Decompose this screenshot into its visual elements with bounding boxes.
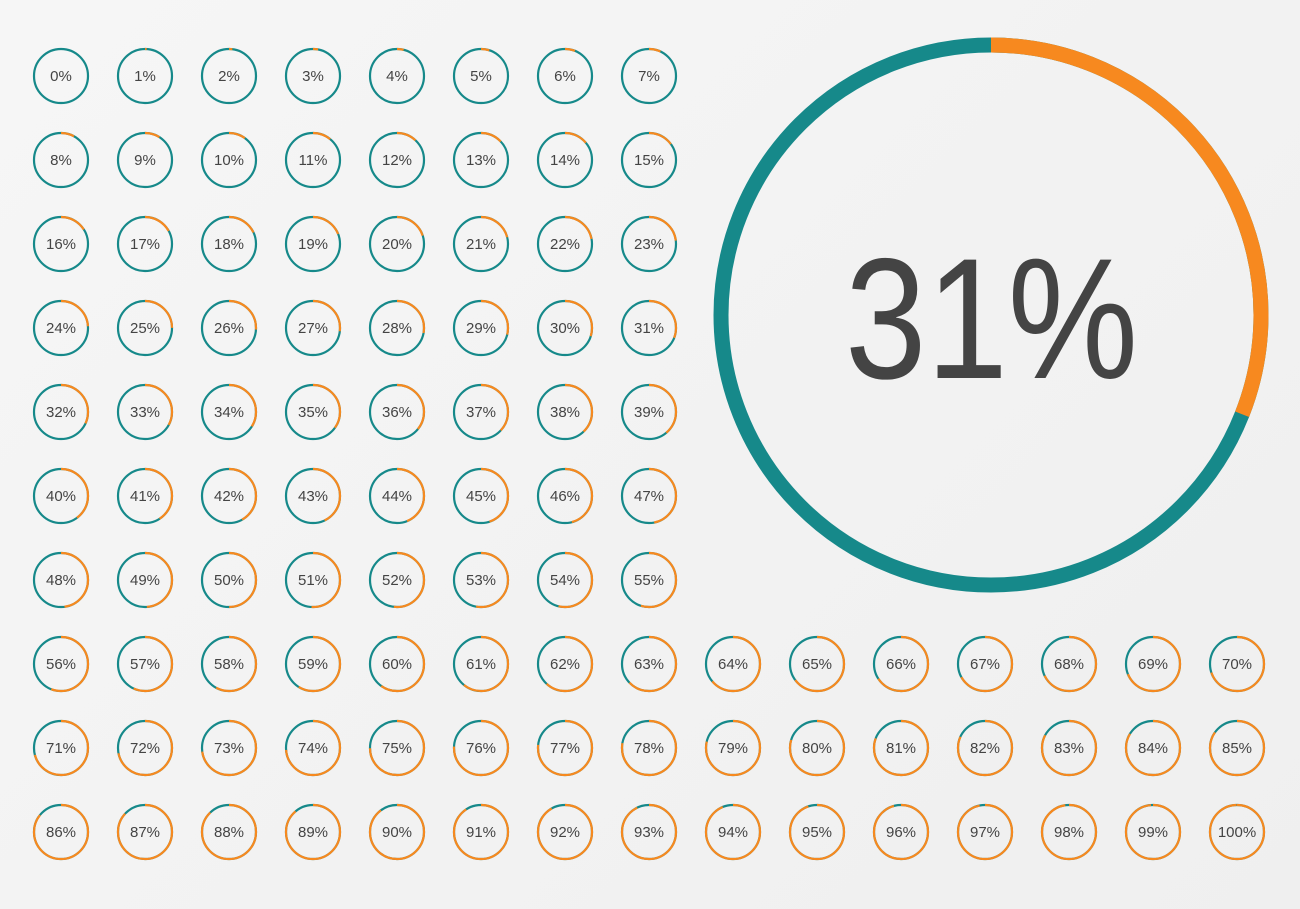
grid of small percentage rings: 8% xyxy=(50,152,72,169)
grid of small percentage rings: 26% xyxy=(214,320,244,337)
grid of small percentage rings: 47% xyxy=(634,488,664,505)
grid of small percentage rings: 89% xyxy=(298,824,328,841)
grid of small percentage rings: 55% xyxy=(634,572,664,589)
grid of small percentage rings: 19% xyxy=(298,236,328,253)
grid of small percentage rings: 40% xyxy=(46,488,76,505)
grid of small percentage rings: 76% xyxy=(466,740,496,757)
grid of small percentage rings: 30% xyxy=(550,320,580,337)
grid of small percentage rings: 49% xyxy=(130,572,160,589)
grid of small percentage rings: 69% xyxy=(1138,656,1168,673)
grid of small percentage rings: 98% xyxy=(1054,824,1084,841)
grid of small percentage rings: 85% xyxy=(1222,740,1252,757)
grid of small percentage rings: 42% xyxy=(214,488,244,505)
grid of small percentage rings: 0% xyxy=(50,68,72,85)
grid of small percentage rings: 94% xyxy=(718,824,748,841)
grid of small percentage rings: 62% xyxy=(550,656,580,673)
grid of small percentage rings: 63% xyxy=(634,656,664,673)
grid of small percentage rings: 14% xyxy=(550,152,580,169)
grid of small percentage rings: 43% xyxy=(298,488,328,505)
grid of small percentage rings: 28% xyxy=(382,320,412,337)
grid of small percentage rings: 36% xyxy=(382,404,412,421)
grid of small percentage rings: 97% xyxy=(970,824,1000,841)
grid of small percentage rings: 53% xyxy=(466,572,496,589)
grid of small percentage rings: 57% xyxy=(130,656,160,673)
grid of small percentage rings: 35% xyxy=(298,404,328,421)
grid of small percentage rings: 1% xyxy=(134,68,156,85)
grid of small percentage rings: 71% xyxy=(46,740,76,757)
grid of small percentage rings: 4% xyxy=(386,68,408,85)
grid of small percentage rings: 81% xyxy=(886,740,916,757)
grid of small percentage rings: 60% xyxy=(382,656,412,673)
grid of small percentage rings: 84% xyxy=(1138,740,1168,757)
grid of small percentage rings: 59% xyxy=(298,656,328,673)
grid of small percentage rings: 92% xyxy=(550,824,580,841)
grid of small percentage rings: 2% xyxy=(218,68,240,85)
grid of small percentage rings: 15% xyxy=(634,152,664,169)
grid of small percentage rings: 54% xyxy=(550,572,580,589)
grid of small percentage rings: 87% xyxy=(130,824,160,841)
grid of small percentage rings: 78% xyxy=(634,740,664,757)
grid of small percentage rings: 46% xyxy=(550,488,580,505)
grid of small percentage rings: 91% xyxy=(466,824,496,841)
grid of small percentage rings: 37% xyxy=(466,404,496,421)
grid of small percentage rings: 80% xyxy=(802,740,832,757)
grid of small percentage rings: 45% xyxy=(466,488,496,505)
grid of small percentage rings: 79% xyxy=(718,740,748,757)
grid of small percentage rings: 21% xyxy=(466,236,496,253)
grid of small percentage rings: 29% xyxy=(466,320,496,337)
grid of small percentage rings: 13% xyxy=(466,152,496,169)
grid of small percentage rings: 6% xyxy=(554,68,576,85)
grid of small percentage rings: 93% xyxy=(634,824,664,841)
grid of small percentage rings: 23% xyxy=(634,236,664,253)
grid of small percentage rings: 48% xyxy=(46,572,76,589)
grid of small percentage rings: 68% xyxy=(1054,656,1084,673)
grid of small percentage rings: 72% xyxy=(130,740,160,757)
grid of small percentage rings: 66% xyxy=(886,656,916,673)
grid of small percentage rings: 34% xyxy=(214,404,244,421)
grid of small percentage rings: 24% xyxy=(46,320,76,337)
grid of small percentage rings: 5% xyxy=(470,68,492,85)
grid of small percentage rings: 73% xyxy=(214,740,244,757)
big percentage ring xyxy=(721,45,1261,585)
grid of small percentage rings: 17% xyxy=(130,236,160,253)
grid of small percentage rings: 95% xyxy=(802,824,832,841)
grid of small percentage rings: 18% xyxy=(214,236,244,253)
big label: 31%: 31% xyxy=(845,223,1138,415)
grid of small percentage rings: 10% xyxy=(214,152,244,169)
grid of small percentage rings: 96% xyxy=(886,824,916,841)
grid of small percentage rings: 7% xyxy=(638,68,660,85)
grid of small percentage rings: 31% xyxy=(634,320,664,337)
grid of small percentage rings: 11% xyxy=(299,152,327,169)
grid of small percentage rings: 88% xyxy=(214,824,244,841)
grid of small percentage rings: 100% xyxy=(1218,824,1256,841)
grid of small percentage rings: 41% xyxy=(130,488,160,505)
grid of small percentage rings: 22% xyxy=(550,236,580,253)
grid of small percentage rings: 3% xyxy=(302,68,324,85)
grid of small percentage rings: 44% xyxy=(382,488,412,505)
grid of small percentage rings: 52% xyxy=(382,572,412,589)
grid of small percentage rings: 58% xyxy=(214,656,244,673)
grid of small percentage rings: 25% xyxy=(130,320,160,337)
grid of small percentage rings: 82% xyxy=(970,740,1000,757)
grid of small percentage rings: 77% xyxy=(550,740,580,757)
grid of small percentage rings: 65% xyxy=(802,656,832,673)
grid of small percentage rings: 39% xyxy=(634,404,664,421)
grid of small percentage rings: 64% xyxy=(718,656,748,673)
grid of small percentage rings: 20% xyxy=(382,236,412,253)
grid of small percentage rings: 86% xyxy=(46,824,76,841)
grid of small percentage rings: 67% xyxy=(970,656,1000,673)
grid of small percentage rings: 27% xyxy=(298,320,328,337)
grid of small percentage rings: 16% xyxy=(46,236,76,253)
grid of small percentage rings: 83% xyxy=(1054,740,1084,757)
grid of small percentage rings: 12% xyxy=(382,152,412,169)
grid of small percentage rings: 90% xyxy=(382,824,412,841)
grid of small percentage rings: 74% xyxy=(298,740,328,757)
grid of small percentage rings: 9% xyxy=(134,152,156,169)
grid of small percentage rings: 70% xyxy=(1222,656,1252,673)
grid of small percentage rings: 51% xyxy=(298,572,328,589)
grid of small percentage rings: 61% xyxy=(466,656,496,673)
grid of small percentage rings: 56% xyxy=(46,656,76,673)
grid of small percentage rings: 33% xyxy=(130,404,160,421)
grid of small percentage rings: 99% xyxy=(1138,824,1168,841)
grid of small percentage rings: 38% xyxy=(550,404,580,421)
grid of small percentage rings: 32% xyxy=(46,404,76,421)
grid of small percentage rings: 75% xyxy=(382,740,412,757)
grid of small percentage rings: 50% xyxy=(214,572,244,589)
